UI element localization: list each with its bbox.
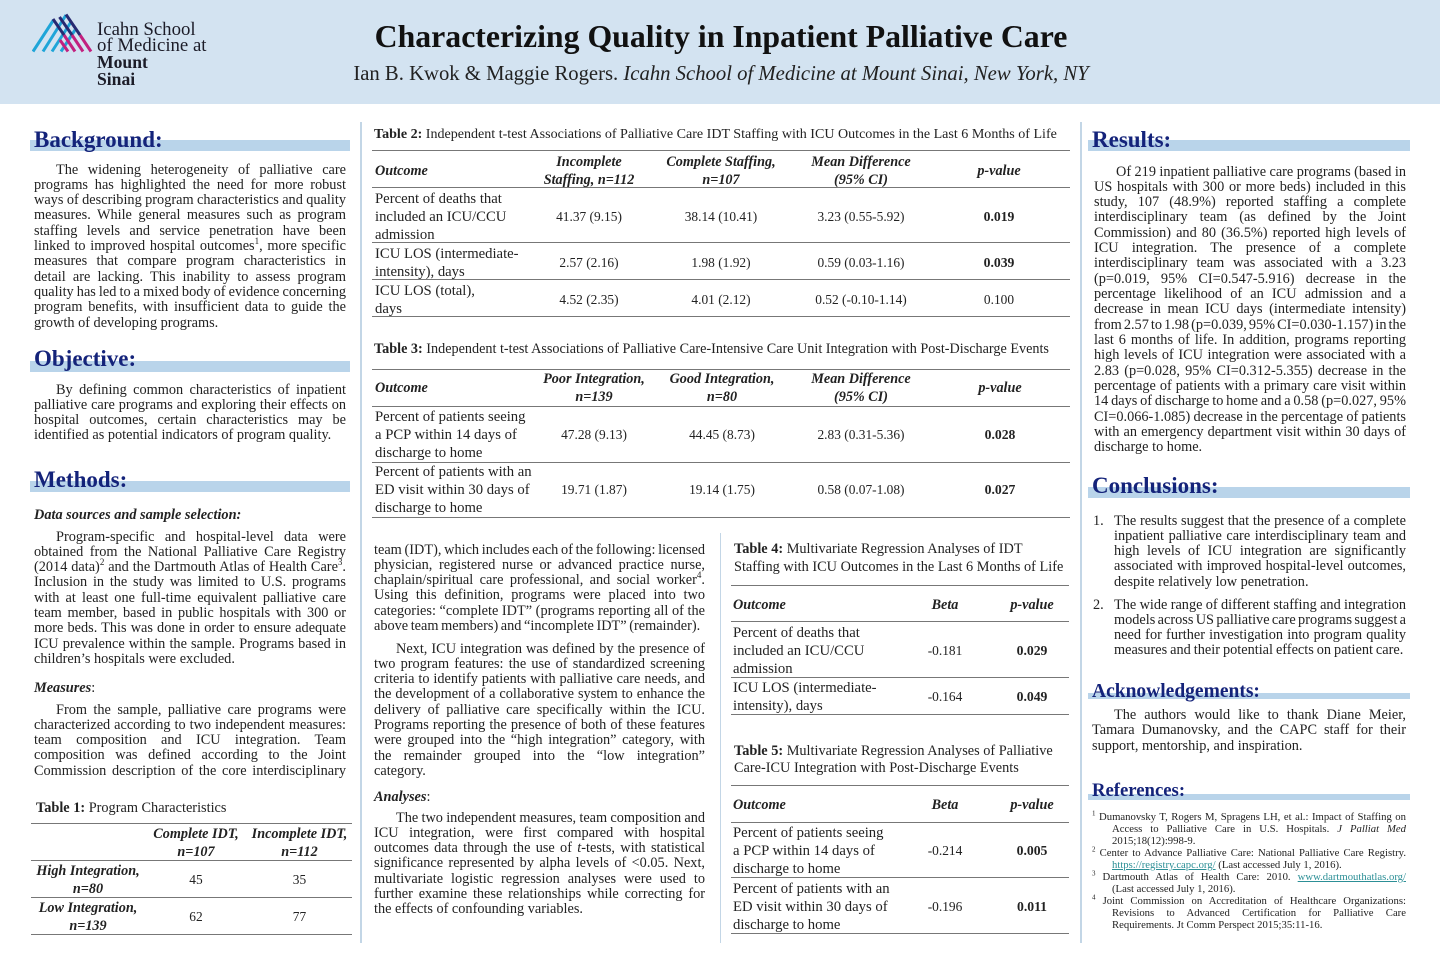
- text: objective: identified as potential indicators of program quality.: [34, 427, 331, 443]
- heading: References: [1088, 780, 1410, 801]
- references list: Requirements. Jt Comm Perspect 2015;35:11-16.: [1112, 919, 1322, 931]
- table 4: multivariate regression IDT staffing: included an ICU/CCU: [733, 642, 864, 658]
- table 3: ICU integration and post-discharge events: Mean Difference: [811, 371, 911, 387]
- conclusion 2: measures and their potential effects on patient care.: [1114, 642, 1403, 658]
- references list: 4 Joint Commission on Accreditation of Healthcare Organizations:: [1092, 893, 1406, 907]
- conclusion 1: 1.: [1093, 512, 1104, 528]
- conclusion 2: [1093, 596, 1406, 658]
- text: methods continued: above team members) and “incomplete IDT” (remainder).: [374, 618, 700, 634]
- text: results: from 2.57 to 1.98 (p=0.039, 95% CI=0.030-1.157) in the: [1094, 317, 1406, 333]
- table 4: multivariate regression IDT staffing: p-value: [1010, 596, 1054, 612]
- text: data sources: Program-specific and hospital-level data were: [56, 528, 346, 544]
- text: objective: palliative care programs and exploring their effects on: [34, 397, 346, 413]
- text: measures: Commission description of the core interdisciplinary: [34, 763, 346, 779]
- text: methods continued: chaplain/spiritual care professional, and social worker4.: [374, 570, 705, 588]
- text: results: [1094, 164, 1406, 455]
- table 5: multivariate regression ICU integration: discharge to home: [733, 916, 840, 932]
- table 4: multivariate regression IDT staffing: Percent of deaths that: [733, 624, 860, 640]
- table 5: multivariate regression ICU integration: discharge to home: [733, 861, 840, 877]
- table 2: IDT staffing and ICU outcomes: admission: [375, 226, 435, 242]
- text: results: US hospitals with 300 or more beds) included in this: [1094, 179, 1406, 195]
- text: background: ways of describing program characteristics and quality: [34, 192, 346, 208]
- text: results: ICU integration. The presence of a complete: [1094, 240, 1406, 256]
- table 1: program characteristics: 35: [293, 872, 306, 887]
- text: analyses: further examine these relationships while correcting for: [374, 886, 705, 902]
- text: results: decrease in mean ICU days (intermediate intensity): [1094, 301, 1406, 317]
- text: analyses: [374, 810, 705, 917]
- table 3: ICU integration and post-discharge events: ED visit within 30 days of: [375, 482, 530, 498]
- table 5: multivariate regression ICU integration: ED visit within 30 days of: [733, 898, 888, 914]
- logo wordmark: of Medicine at: [97, 35, 207, 56]
- conclusion 2: models across US palliative care programs suggest a: [1114, 612, 1406, 628]
- table 4: multivariate regression IDT staffing: admission: [733, 660, 793, 676]
- subheading: measures: Measures:: [34, 680, 95, 696]
- text: acknowledgements: [1092, 707, 1406, 754]
- text: background: quality has led to a mixed body of evidence concerning: [34, 284, 346, 300]
- heading: Conclusions: Conclusions:: [1092, 473, 1219, 498]
- text: analyses: The two independent measures, team composition and: [396, 810, 705, 826]
- heading: Acknowledgements: Acknowledgements:: [1092, 681, 1260, 702]
- conclusion 1: inpatient palliative care interdisciplinary team and: [1114, 528, 1406, 544]
- table 3: ICU integration and post-discharge events: Good Integration,: [670, 371, 774, 387]
- text: methods continued: Using this definition, programs were placed into two: [374, 587, 705, 603]
- table 4: multivariate regression IDT staffing: 0.029: [1017, 642, 1047, 658]
- text: results: discharge to home.: [1094, 439, 1202, 455]
- text: background: detail are lacking. This inability to assess program: [34, 269, 346, 285]
- authors: Ian B. Kwok & Maggie Rogers. Icahn School of Medicine at Mount Sinai, New York, NY: [353, 63, 1089, 85]
- text: measures: From the sample, palliative care programs were: [56, 702, 346, 718]
- table 3: ICU integration and post-discharge events: n=80: [707, 389, 737, 405]
- table 3: ICU integration and post-discharge events: 0.027: [985, 482, 1015, 497]
- table 4 title: Table 4: Multivariate Regression Analyses of IDT: [734, 541, 1023, 557]
- table 3: ICU integration and post-discharge events: 44.45 (8.73): [689, 426, 755, 442]
- table 2: IDT staffing and ICU outcomes: p-value: [977, 162, 1021, 178]
- table 3: ICU integration and post-discharge events: [372, 369, 1070, 518]
- heading: Results: [1088, 127, 1410, 152]
- table 2: IDT staffing and ICU outcomes: 0.59 (0.03-1.16): [817, 254, 905, 270]
- table 2: IDT staffing and ICU outcomes: 38.14 (10.41): [685, 208, 757, 224]
- table 4: multivariate regression IDT staffing: -0.164: [928, 689, 962, 704]
- table 2: IDT staffing and ICU outcomes: 0.039: [984, 254, 1014, 270]
- table 2: IDT staffing and ICU outcomes: 4.52 (2.35): [559, 292, 619, 306]
- table 2: IDT staffing and ICU outcomes: n=107: [702, 172, 740, 188]
- text: ICU integration: criteria to identify patients with palliative care needs, and: [374, 671, 705, 687]
- conclusion 2: 2.: [1093, 596, 1104, 612]
- table 2: IDT staffing and ICU outcomes: 41.37 (9.15): [556, 208, 622, 224]
- heading: Background: Background:: [34, 127, 163, 152]
- text: objective: hospital outcomes, certain characteristics may be: [34, 412, 346, 428]
- conclusion 1: [1093, 512, 1406, 590]
- heading: Acknowledgements: [1088, 681, 1410, 702]
- table 2: IDT staffing and ICU outcomes: 0.52 (-0.10-1.14): [815, 292, 907, 306]
- table 2: IDT staffing and ICU outcomes: Staffing, n=112: [544, 172, 634, 188]
- table 5: multivariate regression ICU integration: Beta: [932, 797, 958, 813]
- text: background: [34, 162, 346, 331]
- text: results: last 6 months of life. In addition, programs reporting: [1094, 332, 1406, 348]
- heading: Conclusions: [1088, 473, 1410, 498]
- table 1: program characteristics: n=112: [281, 844, 318, 860]
- table 2: IDT staffing and ICU outcomes: 2.57 (2.16): [559, 254, 619, 270]
- text: ICU integration: category.: [374, 763, 426, 779]
- table 4: multivariate regression IDT staffing: Beta: [932, 596, 958, 612]
- text: data sources: team member, based in public hospitals with 300 or: [34, 605, 346, 621]
- table 3: ICU integration and post-discharge events: Poor Integration,: [543, 371, 645, 387]
- text: methods continued: categories: “complete IDT” (programs reporting all of the: [374, 603, 705, 619]
- references list: 1 Dumanovsky T, Rogers M, Spragens LH, et al.: Impact of Staffing on: [1092, 809, 1406, 823]
- table 1 title: Table 1: Program Characteristics: [36, 800, 226, 816]
- table 3: ICU integration and post-discharge events: p-value: [978, 380, 1022, 396]
- text: acknowledgements: The authors would like to thank Diane Meier,: [1114, 707, 1406, 723]
- text: background: measures that compare program characteristics in: [34, 253, 346, 269]
- table 2: IDT staffing and ICU outcomes: ICU LOS (total),: [375, 282, 475, 298]
- table 4: multivariate regression IDT staffing: [731, 585, 1069, 715]
- text: ICU integration: the development of a collaborative system to enhance the: [374, 686, 705, 702]
- text: measures: team composition and ICU integration. Team: [34, 732, 346, 748]
- references list: Access to Palliative Care in U.S. Hospitals. J Palliat Med: [1112, 823, 1406, 835]
- table 1: program characteristics: Complete IDT,: [153, 826, 239, 842]
- text: ICU integration: delivery of palliative care specifically within the ICU.: [374, 702, 705, 718]
- table 5: multivariate regression ICU integration: 0.011: [1017, 898, 1047, 914]
- table 2: IDT staffing and ICU outcomes: (95% CI): [834, 172, 888, 188]
- table 1: program characteristics: [31, 823, 352, 935]
- table 2: IDT staffing and ICU outcomes: 0.019: [984, 208, 1014, 224]
- subheading: analyses: Analyses:: [374, 789, 430, 805]
- text: results: high levels of ICU integration were associated with a: [1094, 347, 1406, 363]
- text: measures: composition was defined according to the Joint: [34, 747, 346, 763]
- text: results: interdisciplinary team (as defined by the Joint: [1094, 209, 1406, 225]
- text: methods continued: [374, 542, 705, 634]
- table 2: IDT staffing and ICU outcomes: Incomplete: [556, 154, 622, 170]
- table 2: IDT staffing and ICU outcomes: [372, 150, 1070, 317]
- references list: https://registry.capc.org/ (Last accessed July 1, 2016).: [1112, 859, 1342, 871]
- table 2: IDT staffing and ICU outcomes: included an ICU/CCU: [375, 208, 506, 224]
- table 5 title: Care-ICU Integration with Post-Discharge Events: [734, 760, 1019, 776]
- text: background: programs has highlighted the need for more robust: [34, 177, 346, 193]
- heading: Methods: Methods:: [34, 467, 127, 492]
- table 2: IDT staffing and ICU outcomes: 1.98 (1.92): [691, 254, 751, 270]
- references list: 2 Center to Advance Palliative Care: National Palliative Care Registry.: [1092, 845, 1406, 859]
- table 3: ICU integration and post-discharge events: discharge to home: [375, 444, 482, 460]
- table 3: ICU integration and post-discharge events: 2.83 (0.31-5.36): [817, 426, 905, 442]
- table 4: multivariate regression IDT staffing: Outcome: [733, 596, 786, 612]
- text: ICU integration: the remainder grouped into the “low integration”: [374, 748, 705, 764]
- table 3 title: Table 3: Independent t-test Associations of Palliative Care-Intensive Care Unit Integration with Post-Discharge Events: [374, 341, 1049, 357]
- text: ICU integration: two program features: the use of standardized screening: [374, 656, 705, 672]
- text: data sources: [34, 528, 346, 667]
- table 3: ICU integration and post-discharge events: Outcome: [375, 380, 428, 396]
- table 4: multivariate regression IDT staffing: intensity), days: [733, 698, 823, 714]
- title: Characterizing Quality in Inpatient Palliative Care: [375, 19, 1067, 54]
- conclusion 2: The wide range of different staffing and integration: [1114, 596, 1406, 612]
- heading: References: References:: [1092, 780, 1185, 801]
- table 3: ICU integration and post-discharge events: a PCP within 14 days of: [375, 426, 517, 442]
- heading: Background: [30, 127, 350, 152]
- text: results: percentage likelihood of an ICU admission and a: [1094, 286, 1406, 302]
- table 3: ICU integration and post-discharge events: (95% CI): [834, 389, 888, 405]
- conclusion 1: The results suggest that the presence of a complete: [1114, 512, 1406, 528]
- text: measures: characterized according to two independent measures:: [34, 717, 346, 733]
- text: data sources: Inclusion in the study was limited to U.S. programs: [34, 574, 346, 590]
- table 5: multivariate regression ICU integration: p-value: [1010, 797, 1054, 813]
- table 1: program characteristics: High Integration,: [36, 863, 140, 879]
- heading: Methods: [30, 467, 350, 492]
- table 5: multivariate regression ICU integration: a PCP within 14 days of: [733, 843, 875, 859]
- references list: [1092, 809, 1406, 931]
- references list: Revisions to Advanced Certification for Palliative Care: [1112, 907, 1406, 919]
- text: results: Commission) and 80 (36.5%) reported high levels of: [1094, 225, 1406, 241]
- text: background: measures. While general measures such as program: [34, 207, 346, 223]
- table 5: multivariate regression ICU integration: Percent of patients with an: [733, 880, 890, 896]
- table 1: program characteristics: 62: [189, 909, 203, 924]
- text: methods continued: physician, registered nurse or advanced practice nurse,: [374, 557, 705, 573]
- text: background: growth of developing programs.: [34, 315, 218, 331]
- conclusion 2: need for further investigation into program quality: [1114, 627, 1406, 643]
- text: results: 14 days of discharge to home and a 0.58 (p=0.027, 95%: [1094, 393, 1406, 409]
- text: ICU integration: Programs reporting the presence of both of these features: [374, 717, 705, 733]
- heading: Objective: Objective:: [34, 346, 136, 371]
- table 3: ICU integration and post-discharge events: n=139: [575, 389, 613, 405]
- conclusion 1: high levels of ICU integration are significantly: [1114, 543, 1406, 559]
- text: data sources: ICU prevalence within the sample. Programs based in: [34, 636, 346, 652]
- table 2: IDT staffing and ICU outcomes: intensity), days: [375, 264, 465, 280]
- references list: 2015;18(12):998-9.: [1112, 835, 1195, 847]
- text: data sources: children’s hospitals were excluded.: [34, 651, 235, 667]
- table 5: multivariate regression ICU integration: -0.196: [928, 898, 962, 914]
- text: analyses: significance represented by alpha levels of <0.05. Next,: [374, 855, 705, 871]
- table 4 title: Staffing with ICU Outcomes in the Last 6 Months of Life: [734, 559, 1063, 575]
- table 1: program characteristics: n=80: [73, 881, 103, 897]
- table 2: IDT staffing and ICU outcomes: Mean Difference: [811, 154, 911, 170]
- text: objective: By defining common characteristics of inpatient: [56, 382, 346, 398]
- table 1: program characteristics: n=107: [177, 844, 215, 860]
- table 3: ICU integration and post-discharge events: discharge to home: [375, 500, 482, 516]
- table 2: IDT staffing and ICU outcomes: days: [375, 300, 402, 316]
- text: acknowledgements: Tamara Dumanovsky, and the CAPC staff for their: [1092, 722, 1406, 738]
- table 1: program characteristics: Low Integration,: [39, 900, 137, 916]
- table 2 title: Table 2: Independent t-test Associations of Palliative Care IDT Staffing with ICU Outcomes in the Last 6 Months of Life: [374, 126, 1057, 142]
- text: ICU integration: [374, 640, 705, 779]
- text: ICU integration: Next, ICU integration was defined by the presence of: [396, 640, 705, 656]
- logo wordmark: Mount: [97, 52, 148, 72]
- table 5: multivariate regression ICU integration: -0.214: [928, 843, 962, 858]
- references list: (Last accessed July 1, 2016).: [1112, 883, 1235, 895]
- table 5: multivariate regression ICU integration: [731, 785, 1069, 934]
- logo wordmark: Sinai: [97, 69, 135, 89]
- text: ICU integration: were grouped into the “high integration” category, with: [374, 732, 705, 748]
- text: data sources: obtained from the National Palliative Care Registry: [34, 544, 346, 560]
- table 5: multivariate regression ICU integration: Percent of patients seeing: [733, 825, 884, 841]
- table 4: multivariate regression IDT staffing: 0.049: [1017, 689, 1047, 704]
- header band: [0, 0, 1440, 104]
- table 1: program characteristics: n=139: [69, 918, 107, 934]
- table 3: ICU integration and post-discharge events: 0.58 (0.07-1.08): [817, 482, 905, 497]
- text: background: linked to improved hospital outcomes1, more specific: [34, 236, 346, 254]
- text: results: study, 107 (48.9%) reported staffing a complete: [1094, 194, 1406, 210]
- conclusion 1: despite relatively low penetration.: [1114, 574, 1309, 590]
- table 3: ICU integration and post-discharge events: Percent of patients seeing: [375, 408, 526, 424]
- table 1: program characteristics: 77: [293, 909, 306, 924]
- conclusion 1: associated with improved hospital-level outcomes,: [1114, 558, 1406, 574]
- table 3: ICU integration and post-discharge events: 19.71 (1.87): [561, 482, 627, 497]
- table 3: ICU integration and post-discharge events: 47.28 (9.13): [561, 426, 627, 442]
- text: methods continued: team (IDT), which includes each of the following: licensed: [374, 542, 705, 558]
- text: measures: [34, 702, 346, 779]
- text: data sources: (2014 data)2 and the Dartmouth Atlas of Health Care3.: [34, 557, 346, 575]
- table 5 title: Table 5: Multivariate Regression Analyses of Palliative: [734, 743, 1053, 759]
- text: background: staffing levels and service penetration have been: [34, 223, 346, 239]
- text: results: with an emergency department visit within 30 days of: [1094, 424, 1406, 440]
- text: results: 2.83 (p=0.028, 95% CI=0.312-5.355) decrease in the: [1094, 363, 1406, 379]
- text: data sources: with at least one full-time equivalent palliative care: [34, 590, 346, 606]
- table 5: multivariate regression ICU integration: 0.005: [1017, 843, 1047, 858]
- text: data sources: more beds. This was done in order to ensure adequate: [34, 620, 346, 636]
- table 5: multivariate regression ICU integration: Outcome: [733, 797, 786, 813]
- table 4: multivariate regression IDT staffing: ICU LOS (intermediate-: [733, 680, 877, 696]
- table 3: ICU integration and post-discharge events: 19.14 (1.75): [689, 482, 755, 497]
- table 2: IDT staffing and ICU outcomes: 4.01 (2.12): [691, 292, 751, 306]
- text: background: program benefits, with insufficient data to guide the: [34, 299, 346, 315]
- logo wordmark: Icahn School: [97, 19, 196, 40]
- text: analyses: outcomes data through the use of t-tests, with statistical: [374, 840, 705, 856]
- table 2: IDT staffing and ICU outcomes: 0.100: [984, 292, 1014, 306]
- logo wordmark: [97, 19, 207, 89]
- table 2: IDT staffing and ICU outcomes: Outcome: [375, 162, 428, 178]
- table 2: IDT staffing and ICU outcomes: Percent of deaths that: [375, 190, 502, 206]
- text: results: interdisciplinary team was associated with a 3.23: [1094, 255, 1406, 271]
- text: results: (p=0.019, 95% CI=0.547-5.916) decrease in the: [1094, 271, 1406, 287]
- text: acknowledgements: support, mentorship, and inspiration.: [1092, 738, 1302, 754]
- table 3: ICU integration and post-discharge events: Percent of patients with an: [375, 464, 532, 480]
- table 2: IDT staffing and ICU outcomes: 3.23 (0.55-5.92): [817, 208, 905, 224]
- text: analyses: the effects of confounding variables.: [374, 901, 583, 917]
- table 4: multivariate regression IDT staffing: -0.181: [928, 642, 962, 658]
- table 2: IDT staffing and ICU outcomes: Complete Staffing,: [666, 154, 776, 170]
- text: results: CI=0.066-1.085) decrease in the percentage of patients: [1094, 409, 1406, 425]
- references list: 3 Dartmouth Atlas of Health Care: 2010. www.dartmouthatlas.org/: [1092, 869, 1406, 883]
- table 3: ICU integration and post-discharge events: 0.028: [985, 426, 1015, 442]
- text: results: Of 219 inpatient palliative care programs (based in: [1116, 164, 1406, 180]
- heading: Results: Results:: [1092, 127, 1171, 152]
- text: results: percentage of patients with a primary care visit within: [1094, 378, 1406, 394]
- table 2: IDT staffing and ICU outcomes: ICU LOS (intermediate-: [375, 246, 519, 262]
- text: background: The widening heterogeneity of palliative care: [56, 162, 346, 178]
- text: objective: [34, 382, 346, 443]
- table 4 title: [734, 541, 1063, 575]
- text: analyses: multivariate logistic regression analyses were used to: [374, 871, 705, 887]
- heading: Objective: [30, 346, 350, 372]
- icon: Mount Sinai logo mark: [32, 14, 92, 52]
- table 1: program characteristics: Incomplete IDT,: [252, 826, 347, 842]
- subheading: data sources: Data sources and sample selection:: [34, 507, 241, 523]
- table 5 title: [734, 743, 1053, 776]
- table 1: program characteristics: 45: [189, 872, 203, 887]
- text: analyses: ICU integration, were first compared with hospital: [374, 825, 705, 841]
